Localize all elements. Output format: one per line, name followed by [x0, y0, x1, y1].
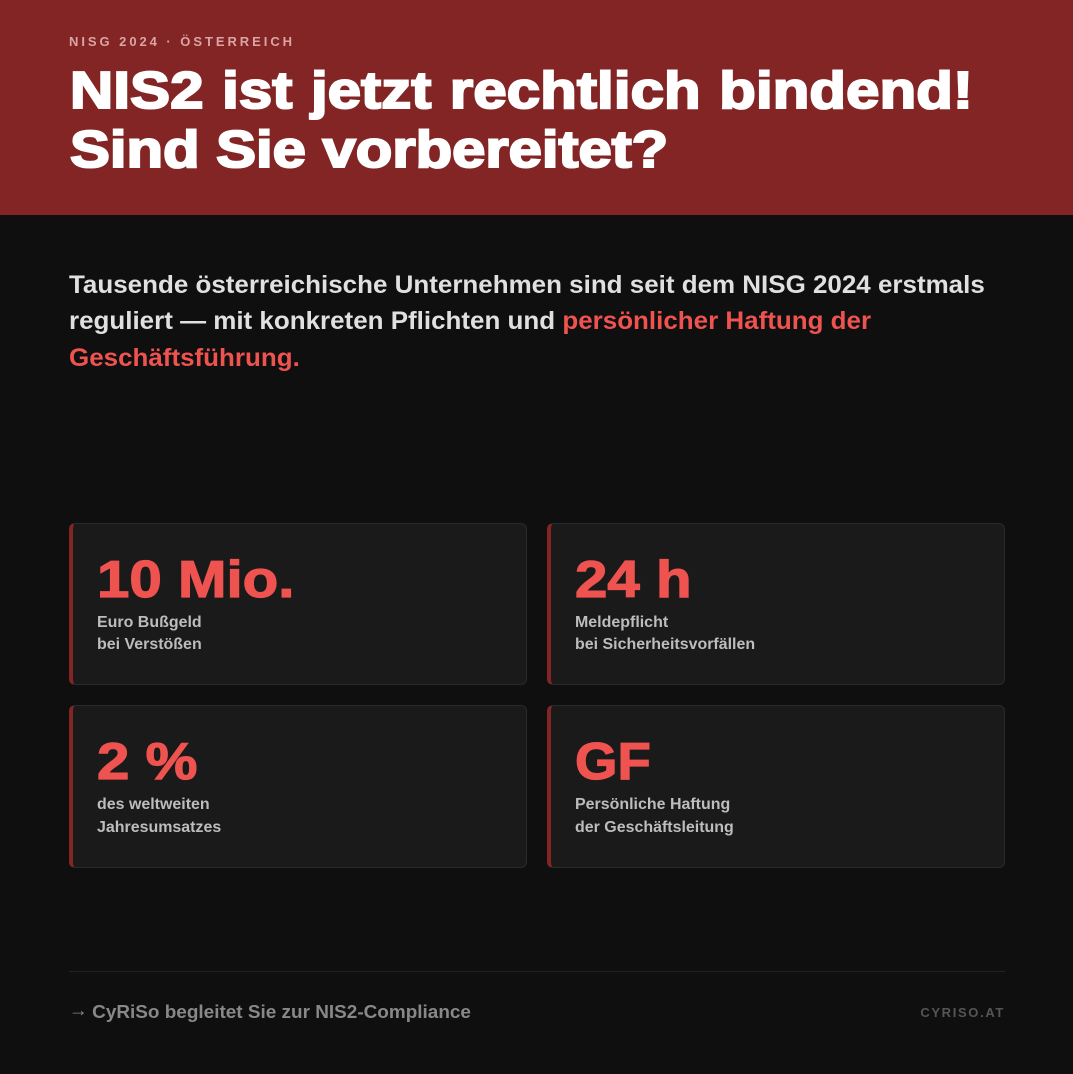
stat card: fine [69, 523, 527, 685]
footer call to action: → CyRiSo begleitet Sie zur NIS2-Compliance [69, 1000, 471, 1022]
stat description [575, 614, 755, 653]
intro text: Geschäftsführung. [69, 344, 300, 372]
stat description: bei Verstößen [97, 636, 202, 653]
intro text: Tausende österreichische Unternehmen sind seit dem NISG 2024 erstmals [69, 271, 985, 299]
stat description: Euro Bußgeld [97, 614, 202, 630]
stat card: reporting duty [547, 523, 1005, 685]
stat description: Persönliche Haftung [575, 796, 730, 813]
stat description: Meldepflicht [575, 614, 668, 630]
header band [0, 0, 1073, 215]
stat card: management liability [547, 705, 1005, 868]
stat value: 24 h [575, 551, 692, 609]
stat description [97, 614, 202, 653]
stat card: turnover [69, 705, 527, 868]
intro text: reguliert — mit konkreten Pflichten und persönlicher Haftung der [69, 307, 871, 335]
eyebrow label: NISG 2024 · ÖSTERREICH [69, 34, 295, 49]
title [70, 62, 973, 179]
stat value: 10 Mio. [97, 551, 294, 609]
title: Sind Sie vorbereitet? [70, 121, 668, 179]
footer website: CYRISO.AT [920, 1005, 1005, 1020]
stat description: Jahresumsatzes [97, 819, 221, 836]
stat description: des weltweiten [97, 796, 210, 813]
stat description: bei Sicherheitsvorfällen [575, 636, 755, 653]
intro text [69, 271, 985, 372]
title: NIS2 ist jetzt rechtlich bindend! [70, 62, 973, 120]
stat value: 2 % [97, 733, 197, 791]
stat value: GF [575, 733, 651, 791]
stat description: der Geschäftsleitung [575, 819, 734, 836]
stat description [575, 796, 734, 836]
stat description [97, 796, 221, 836]
